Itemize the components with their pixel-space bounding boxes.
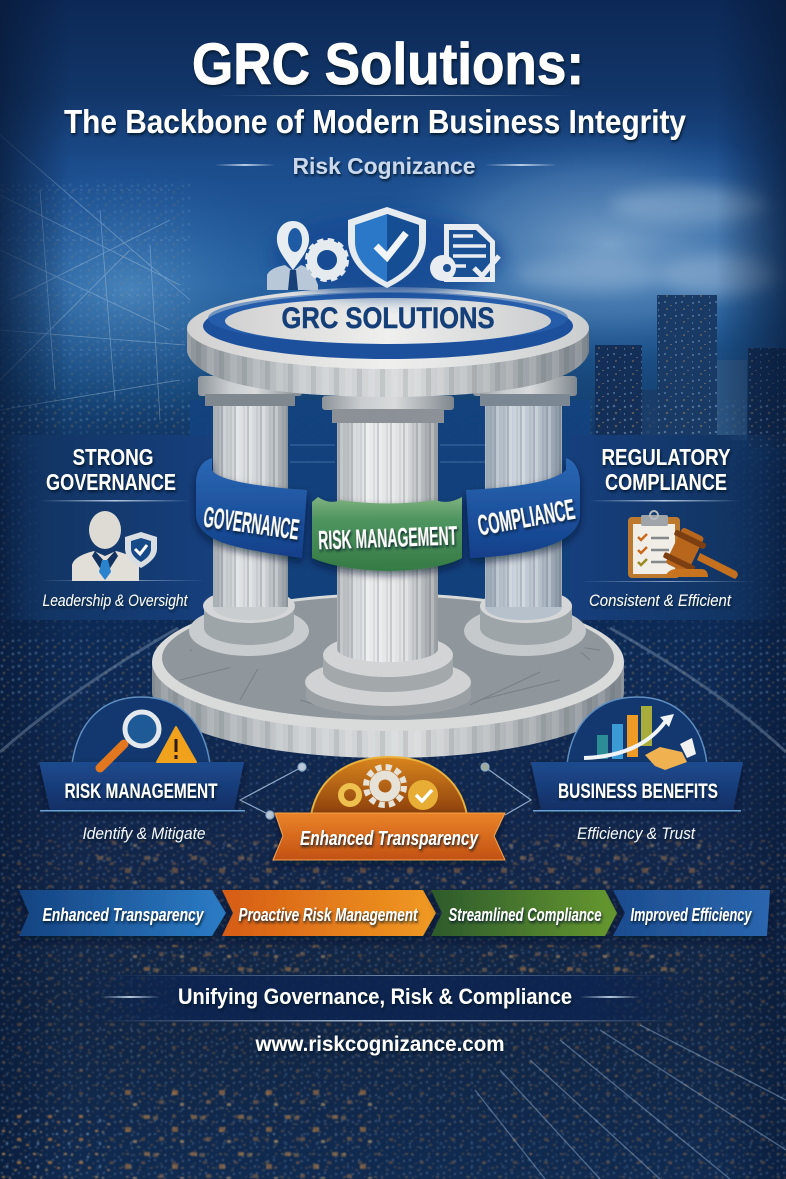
title — [64, 32, 687, 140]
chevron: proactive risk management — [222, 890, 436, 936]
skyline — [595, 295, 786, 448]
panel: strong governance — [0, 435, 212, 620]
icon: person — [267, 221, 318, 290]
chevron: streamlined compliance — [431, 890, 617, 936]
top disk — [187, 287, 589, 397]
band: risk management: RISK MANAGEMENT — [318, 521, 458, 555]
icons: person, gear, shield, document — [267, 207, 503, 297]
heading: strong governance: GOVERNANCE — [46, 469, 176, 495]
icon: clipboard and gavel — [628, 511, 738, 579]
platform base — [152, 593, 624, 758]
website: www.riskcognizance.com — [255, 1033, 504, 1056]
callout: enhanced transparency: Enhanced Transparency — [300, 828, 479, 850]
chevron: improved efficiency — [613, 890, 770, 936]
section: risk management: Identify & Mitigate — [82, 824, 206, 843]
heading: regulatory compliance: REGULATORY — [602, 444, 730, 470]
band: risk management — [312, 497, 462, 571]
section: business benefits: BUSINESS BENEFITS — [558, 780, 718, 803]
chevron: enhanced transparency — [19, 890, 226, 936]
band: governance — [196, 458, 307, 558]
tagline — [60, 975, 720, 1022]
disk label: GRC SOLUTIONS — [282, 302, 494, 335]
icon: growth chart and handshake — [584, 706, 696, 770]
icon: magnifier and warning — [100, 712, 196, 768]
band: compliance — [466, 458, 580, 558]
icon: gear — [308, 241, 346, 279]
band: governance: GOVERNANCE — [201, 502, 301, 547]
icon: leader with shield — [72, 511, 157, 581]
chevron: streamlined compliance: Streamlined Compliance — [448, 905, 602, 925]
icon arch: gears — [311, 757, 467, 815]
tagline: Unifying Governance, Risk & Compliance — [178, 984, 572, 1009]
section: business benefits — [531, 697, 743, 843]
caption: consistent: Consistent & Efficient — [589, 591, 732, 610]
heading: regulatory compliance: COMPLIANCE — [605, 469, 727, 495]
chevron bar: benefits — [19, 890, 770, 936]
title: The Backbone of Modern Business Integrity — [64, 103, 687, 140]
heading: strong governance: STRONG — [72, 444, 154, 470]
caption: leadership: Leadership & Oversight — [42, 591, 189, 610]
connector lines — [240, 763, 531, 819]
column: center — [305, 396, 471, 716]
icon: shield — [348, 207, 426, 288]
section: risk management — [39, 697, 245, 843]
section: business benefits: Efficiency & Trust — [577, 824, 696, 843]
subtitle: brand: Risk Cognizance — [292, 153, 476, 179]
heading: regulatory compliance — [602, 444, 730, 495]
band: compliance: COMPLIANCE — [475, 494, 577, 542]
icon: document — [430, 224, 499, 282]
title: GRC Solutions: — [192, 32, 584, 97]
callout: enhanced transparency — [273, 757, 505, 860]
chevron: proactive risk management: Proactive Risk Management — [238, 905, 418, 925]
chevron: enhanced transparency: Enhanced Transparency — [42, 905, 204, 925]
heading: strong governance — [46, 444, 176, 495]
column: left — [188, 376, 310, 669]
section: risk management: RISK MANAGEMENT — [64, 780, 218, 803]
panel: regulatory compliance — [570, 435, 786, 620]
column: right — [463, 376, 587, 669]
